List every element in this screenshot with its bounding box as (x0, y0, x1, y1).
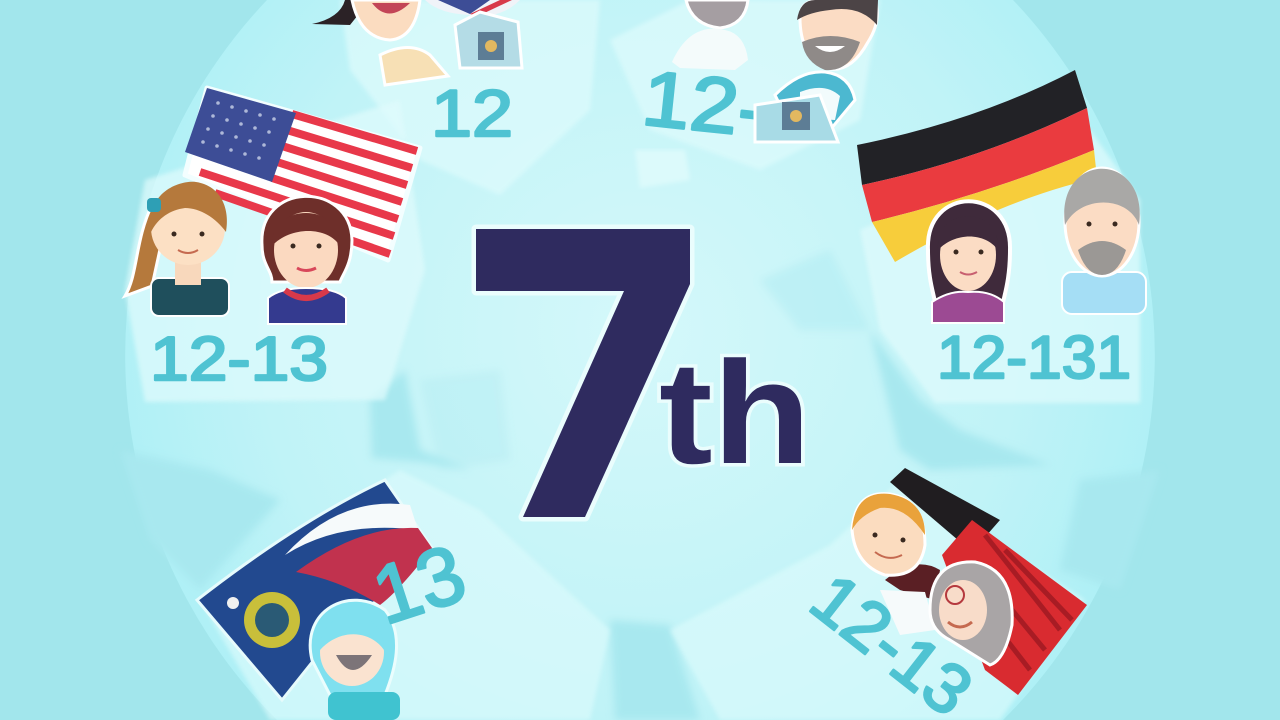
flag: United Kingdom (425, 0, 520, 16)
group: Germany (857, 70, 1146, 391)
icon: book (755, 95, 838, 142)
panel: bottom left hexagon (200, 470, 610, 720)
globe land shapes (120, 250, 1160, 720)
person: grey-haired man (1062, 168, 1146, 314)
group: bottom right (797, 468, 1087, 720)
person: woman with dark hair (262, 196, 352, 324)
person: grey-haired figure (672, 0, 748, 70)
person: woman with blue hair (310, 600, 400, 720)
label: 12-: 12- (638, 53, 772, 154)
numeral 7 (476, 229, 690, 517)
flag: black and red (890, 468, 1087, 695)
flag: Germany (857, 70, 1097, 262)
panel: bottom right hexagon (670, 480, 1085, 720)
panel: right hexagon (860, 130, 1140, 403)
group: bottom left (197, 480, 476, 720)
person: grey-haired woman with glasses (930, 562, 1012, 665)
icon: book (455, 12, 522, 68)
group: USA (125, 88, 420, 394)
person: woman with dark hair (928, 201, 1010, 323)
person: laughing woman with ponytail (312, 0, 448, 85)
person: girl with ponytail (125, 182, 229, 316)
label: 12-13: 12-13 (150, 325, 328, 394)
label: 12: 12 (431, 76, 513, 150)
highlight blob (635, 150, 690, 188)
panel: top right hexagon (610, 0, 880, 170)
flag: United States (185, 88, 420, 260)
panel: left hexagon (125, 100, 425, 402)
person: woman with orange hair (852, 494, 940, 635)
flag: blue white red (197, 480, 432, 700)
person: bearded man (775, 0, 878, 130)
panel: top left hexagon (340, 0, 600, 195)
group: top left (312, 0, 522, 150)
suffix th: th (659, 331, 811, 494)
group: top right (638, 0, 878, 154)
label: 13: 13 (362, 528, 476, 642)
heading: 7th (476, 229, 811, 517)
label: 12-131: 12-131 (937, 324, 1131, 391)
